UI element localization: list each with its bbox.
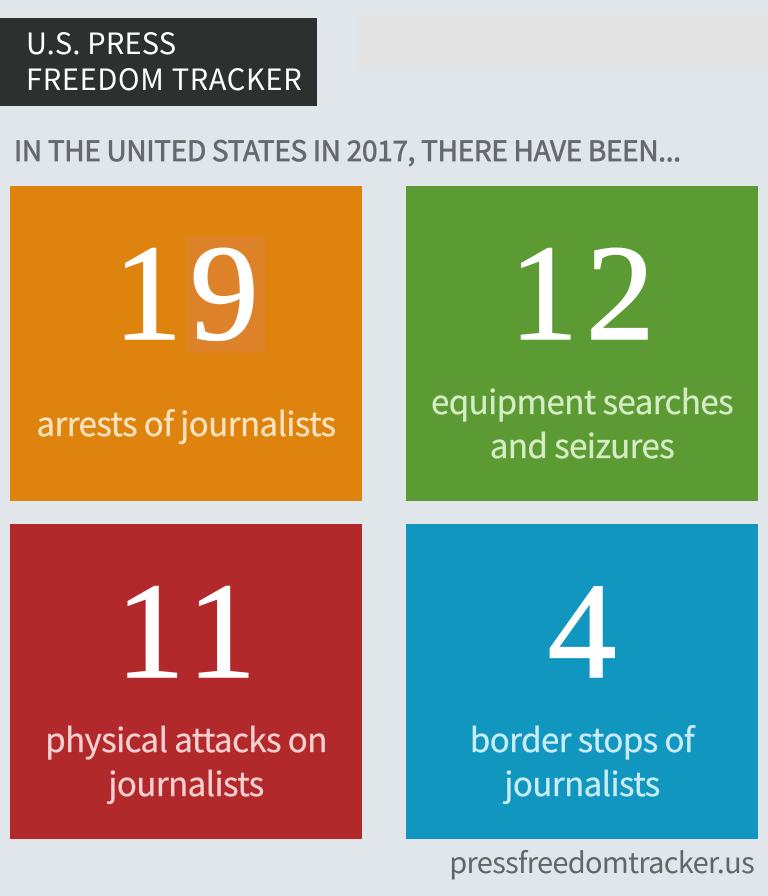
label: equipment: [431, 376, 733, 468]
label: border stops: border stops of: [470, 714, 694, 762]
logo: U.S. Press Freedom Tracker: U.S. PRESS: [26, 21, 176, 63]
label: border stops: journalists: [504, 758, 660, 806]
label: equipment: and seizures: [490, 420, 674, 468]
label: physical attacks: [45, 714, 327, 806]
footer url: pressfreedomtracker.us: [449, 840, 754, 882]
number: 4: 4: [548, 555, 624, 707]
number: 12: 12: [510, 217, 662, 369]
panel: border stops: [406, 524, 758, 839]
logo: U.S. Press Freedom Tracker: [0, 18, 317, 106]
number: 11: 11: [116, 555, 264, 707]
logo: U.S. Press Freedom Tracker: FREEDOM TRACKER: [26, 57, 302, 99]
label: physical attacks: physical attacks on: [45, 714, 327, 762]
label: arrests: arrests of journalists: [36, 398, 336, 446]
label: border stops: [470, 714, 696, 806]
number: 19: 19: [114, 217, 266, 369]
label: physical attacks: journalists: [108, 758, 264, 806]
heading: IN THE UNITED STATES IN 2017, THERE HAVE BEEN...: [14, 130, 681, 170]
blank banner: [356, 14, 768, 71]
label: equipment: equipment searches: [431, 376, 733, 424]
panel: physical attacks: [10, 524, 362, 839]
panel: arrests: [10, 186, 362, 501]
panel: equipment: [406, 186, 758, 501]
